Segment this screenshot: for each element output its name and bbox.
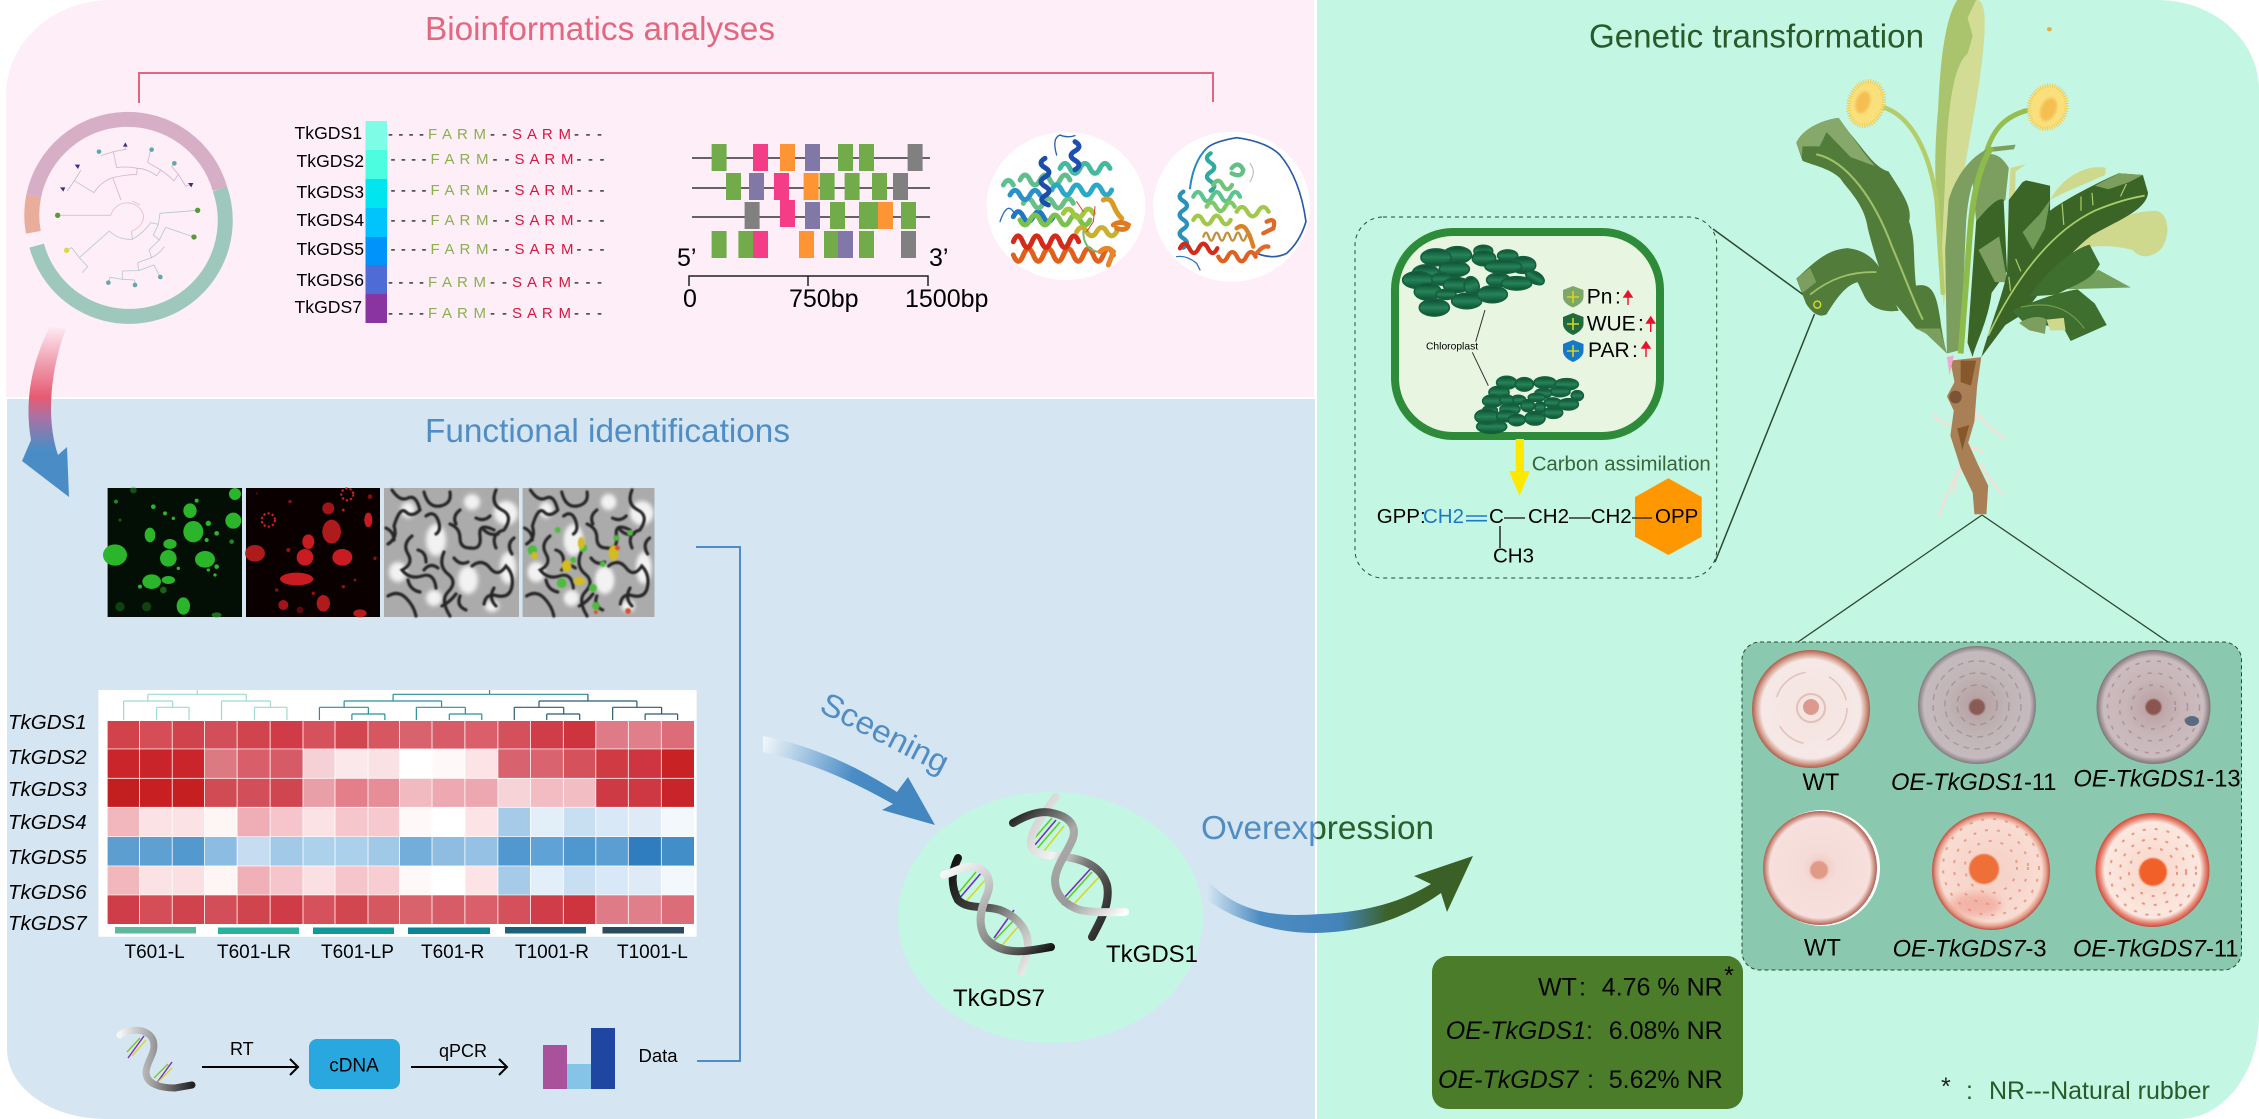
heatmap row labels: TkGDS2 <box>8 746 87 769</box>
results box: natural rubber content: 5.62% NR <box>1609 1066 1723 1094</box>
connectors from root to slices <box>1798 515 2168 642</box>
icon: OPP hexagon <box>1635 478 1702 555</box>
motif alignment rows: F A R M <box>428 126 486 143</box>
photosynthesis callout box <box>1355 217 1717 578</box>
results box: natural rubber content: : <box>1579 974 1586 1002</box>
GPP chemical formula: GPP: <box>1377 505 1426 528</box>
illustration: dandelion plant <box>1796 0 2167 515</box>
heatmap row labels: TkGDS4 <box>8 811 87 834</box>
slice: OE-TkGDS1-13 <box>2096 650 2210 764</box>
slice: OE-TkGDS1-11 <box>1918 646 2036 764</box>
footnote: NR definition: : <box>1966 1077 1973 1105</box>
slice labels: OE-TkGDS1-13 <box>2073 767 2241 793</box>
heading: Functional identifications: Functional identifications <box>425 412 790 449</box>
box: cDNA: cDNA <box>329 1056 379 1076</box>
gene name labels: TkGDS2 <box>297 151 364 171</box>
footnote: NR definition: * <box>1941 1073 1951 1101</box>
heatmap row labels: TkGDS1 <box>8 711 87 734</box>
icon: WUE shield <box>1563 313 1655 336</box>
heatmap row labels: TkGDS7 <box>8 912 88 935</box>
results box: natural rubber content: OE-TkGDS1 <box>1446 1017 1586 1045</box>
results box: natural rubber content: 4.76 % NR <box>1602 974 1723 1002</box>
slice labels: WT <box>1804 936 1841 962</box>
motif alignment rows: S A R M <box>514 212 574 229</box>
results box: natural rubber content: : <box>1586 1017 1593 1045</box>
protein structure models <box>987 132 1310 282</box>
motif alignment rows: - - - <box>574 126 602 143</box>
label: Sceening: Sceening <box>815 685 955 780</box>
motif alignment rows: - - - - <box>390 182 426 199</box>
panel: root slices <box>1742 642 2242 970</box>
icon: Pn shield <box>1563 285 1632 308</box>
motif alignment rows: F A R M <box>428 305 486 322</box>
slice: WT top <box>1752 650 1870 768</box>
plant: center leaves <box>1916 145 2016 357</box>
GPP chemical formula: C <box>1489 505 1504 528</box>
label: Carbon assimilation: Carbon assimilation <box>1532 454 1711 476</box>
heatmap column labels: T601-L <box>124 942 185 963</box>
slice labels: OE-TkGDS7-3 <box>1893 937 2047 963</box>
results box: natural rubber content: OE-TkGDS7 <box>1438 1066 1579 1094</box>
plant: right lower leaves <box>2012 245 2107 341</box>
motif alignment rows: - - - - <box>390 241 426 258</box>
gene structure diagram: 1500bp <box>905 285 988 313</box>
motif alignment rows: F A R M <box>430 241 488 258</box>
icon: PAR shield: PAR <box>1588 339 1630 362</box>
heatmap row labels <box>8 711 88 935</box>
icon: Pn shield: Pn <box>1587 285 1612 308</box>
arrow: yellow down <box>1509 439 1530 496</box>
heatmap column labels: T601-LR <box>217 942 291 963</box>
motif alignment rows: - - - <box>574 274 602 291</box>
gene structure diagram: 3’ <box>929 244 948 272</box>
slice labels <box>1802 767 2241 963</box>
gene name labels: TkGDS3 <box>297 182 364 202</box>
results box: natural rubber content <box>1432 956 1743 1109</box>
slice: WT bottom <box>1763 810 1880 926</box>
icon: Pn shield: : <box>1615 285 1621 308</box>
gene name labels: TkGDS1 <box>295 123 362 143</box>
label: qPCR: qPCR <box>439 1041 487 1061</box>
motif alignment rows: - - - <box>576 182 604 199</box>
heading: Genetic transformation: Genetic transformation <box>1589 18 1924 54</box>
icon: WUE shield: WUE <box>1587 313 1636 336</box>
plant: flower stems <box>1885 108 2026 293</box>
heatmap row labels: TkGDS3 <box>8 778 87 801</box>
panel: functional identifications background <box>7 399 1315 1119</box>
label: TkGDS7: TkGDS7 <box>953 985 1045 1012</box>
heatmap column labels: T601-R <box>421 942 484 963</box>
motif alignment rows: - - <box>490 126 507 143</box>
plant: central tall leaf <box>1935 0 1985 307</box>
motif alignment rows: S A R M <box>514 182 574 199</box>
motif alignment rows: - - - <box>576 241 604 258</box>
heatmap dendrogram <box>124 690 678 720</box>
expression heatmap <box>98 690 697 937</box>
arrow: overexpression <box>1207 856 1473 933</box>
motif alignment rows: - - - - <box>390 212 426 229</box>
heading: Bioinformatics analyses: Bioinformatics analyses <box>425 10 775 47</box>
gene structure diagram <box>677 144 988 313</box>
GPP chemical formula: OPP <box>1655 505 1698 528</box>
gene name labels: TkGDS5 <box>297 239 364 259</box>
motif alignment rows: F A R M <box>428 274 486 291</box>
plant: right big leaf <box>1981 173 2148 357</box>
chloroplast cell <box>1395 232 1660 436</box>
motif alignment rows: - - - - <box>388 274 424 291</box>
motif alignment rows: S A R M <box>512 305 571 322</box>
icon: WUE shield: : <box>1638 313 1644 336</box>
icon: bar chart <box>543 1028 615 1089</box>
motif alignment rows: S A R M <box>514 151 574 168</box>
GPP chemical formula: CH2 <box>1528 505 1569 528</box>
slice: OE-TkGDS7-3 <box>1932 812 2050 930</box>
label: TkGDS1: TkGDS1 <box>1106 941 1198 968</box>
plant: left big leaf <box>1796 118 1947 354</box>
microscopy: merged overlay <box>523 488 654 617</box>
motif alignment rows <box>388 126 604 322</box>
callout connectors from leaf <box>1713 229 1816 562</box>
results box: natural rubber content: 6.08% NR <box>1609 1017 1723 1045</box>
gene name labels: TkGDS7 <box>295 297 362 317</box>
icon: PAR shield: : <box>1632 339 1638 362</box>
heatmap cells <box>108 721 694 924</box>
microscopy: bright field cells <box>384 488 519 617</box>
plant: lower-left leaf <box>1796 248 1899 316</box>
chloroplast label: Chloroplast <box>1426 342 1478 352</box>
motif alignment rows: F A R M <box>430 212 488 229</box>
gene name labels: TkGDS6 <box>297 270 364 290</box>
slice labels: OE-TkGDS7-11 <box>2073 937 2238 963</box>
GPP chemical formula <box>1377 505 1698 568</box>
box: cDNA <box>309 1039 400 1089</box>
microscopy: GFP green channel <box>103 487 242 618</box>
gene structure diagram: 750bp <box>789 285 859 313</box>
label: RT: RT <box>230 1039 254 1059</box>
arrow: screening <box>763 736 935 825</box>
motif alignment rows: S A R M <box>512 126 571 143</box>
panel: bioinformatics background <box>6 0 1314 397</box>
results box: natural rubber content: WT <box>1538 974 1577 1002</box>
icon: RNA strand <box>120 1030 192 1088</box>
gene name labels: TkGDS4 <box>297 210 364 230</box>
motif alignment rows: - - - - <box>388 126 424 143</box>
icon: DNA helix TkGDS7 <box>944 858 1051 972</box>
heatmap row labels: TkGDS6 <box>8 881 87 904</box>
motif alignment rows: S A R M <box>514 241 574 258</box>
motif alignment rows: S A R M <box>512 274 571 291</box>
GPP chemical formula: CH3 <box>1493 545 1534 568</box>
chloroplast label <box>1426 310 1488 386</box>
motif alignment rows: - - <box>490 274 507 291</box>
left curved arrow: bioinformatics to functional <box>22 326 69 497</box>
heatmap column labels: T1001-R <box>515 942 589 963</box>
slice labels: WT <box>1802 770 1839 796</box>
plant: right flower <box>2022 79 2073 135</box>
motif alignment rows: - - <box>492 182 510 199</box>
motif alignment rows: - - <box>490 305 507 322</box>
plant: left flower <box>1842 76 1890 131</box>
arrow: qPCR <box>411 1059 507 1075</box>
motif alignment rows: - - <box>492 212 510 229</box>
arrow: RT <box>202 1059 298 1075</box>
footnote: NR definition: NR---Natural rubber <box>1989 1077 2210 1105</box>
motif alignment rows: F A R M <box>430 151 488 168</box>
qPCR workflow <box>120 1028 678 1089</box>
motif alignment rows: - - - <box>576 151 604 168</box>
heatmap column labels: T1001-L <box>617 942 688 963</box>
plant: roots <box>1934 355 2004 515</box>
motif alignment rows: - - - <box>576 212 604 229</box>
heatmap group color bars <box>115 927 684 934</box>
connector: data to subcellular panels <box>696 547 740 1061</box>
motif alignment rows: F A R M <box>430 182 488 199</box>
icon: leaf sampling ring <box>1814 301 1821 308</box>
bracket connector <box>139 73 1213 103</box>
candidate genes circle <box>898 792 1203 1043</box>
gene structure diagram: 5’ <box>677 244 696 272</box>
motif alignment rows: - - - - <box>390 151 426 168</box>
GPP chemical formula: CH2 <box>1423 505 1464 528</box>
slice labels: OE-TkGDS1-11 <box>1891 770 2056 796</box>
phylogenetic tree ring <box>32 119 225 316</box>
GPP chemical formula: CH2 <box>1591 505 1632 528</box>
heatmap row labels: TkGDS5 <box>8 846 87 869</box>
plant: light back leaves <box>2009 164 2167 289</box>
results box: natural rubber content: * <box>1724 962 1734 990</box>
icon: PAR shield <box>1563 339 1650 362</box>
label: Data: Data <box>638 1045 678 1066</box>
results box: natural rubber content: : <box>1587 1066 1594 1094</box>
icon: DNA helix TkGDS1 <box>1013 797 1125 937</box>
motif alignment rows: - - <box>492 151 510 168</box>
gene name labels <box>295 123 364 317</box>
motif alignment rows: - - - <box>574 305 602 322</box>
gene structure diagram: 0 <box>683 285 697 313</box>
microscopy: RFP red channel <box>245 488 380 617</box>
label: Overexpression: Overexpression <box>1201 809 1434 846</box>
slice: OE-TkGDS7-11 <box>2096 813 2210 927</box>
panel: genetic transformation background <box>1317 0 2259 1119</box>
motif alignment rows: - - - - <box>388 305 424 322</box>
heatmap column labels: T601-LP <box>321 942 394 963</box>
sequence alignment color bar <box>366 121 387 323</box>
heatmap column labels <box>124 942 688 963</box>
motif alignment rows: - - <box>492 241 510 258</box>
chloroplast clusters <box>1403 245 1583 433</box>
subcellular localization microscopy panels <box>103 487 654 618</box>
